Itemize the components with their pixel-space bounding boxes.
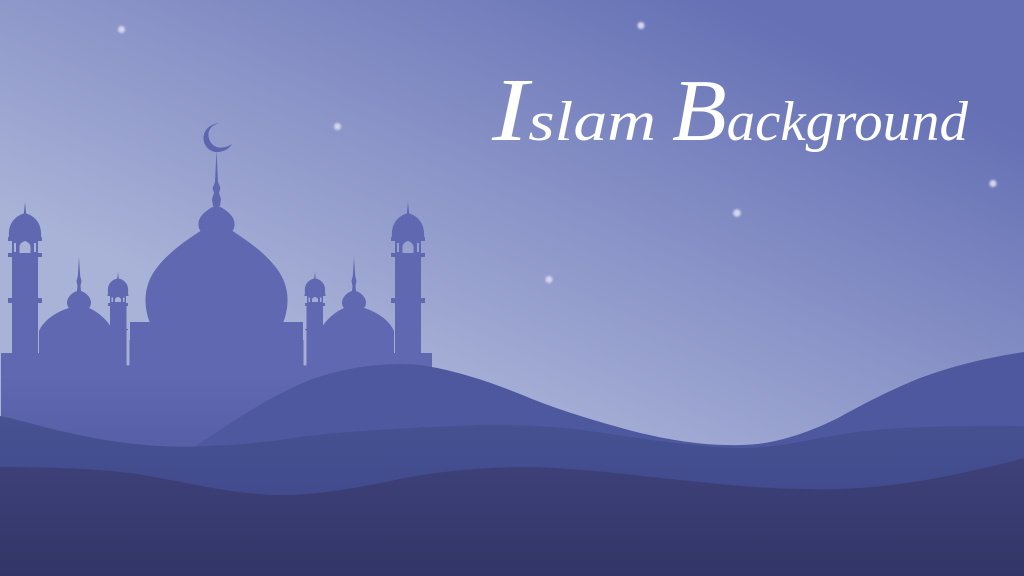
stars [118,22,996,283]
title: Islam [491,61,656,160]
middle hill [0,416,1024,576]
main block [130,322,303,368]
light slits in the base [126,330,306,366]
title [491,61,969,160]
mosque silhouette [1,123,432,480]
lower block joining the towers [39,340,394,354]
front hill [0,458,1024,576]
main spire [212,150,221,206]
crescent moon [203,123,232,152]
right towers and domes [304,202,425,366]
main dome [146,205,288,323]
base terrace [1,353,432,480]
back hill [190,352,1024,576]
title: Background [672,63,969,160]
left towers and domes [8,202,128,366]
